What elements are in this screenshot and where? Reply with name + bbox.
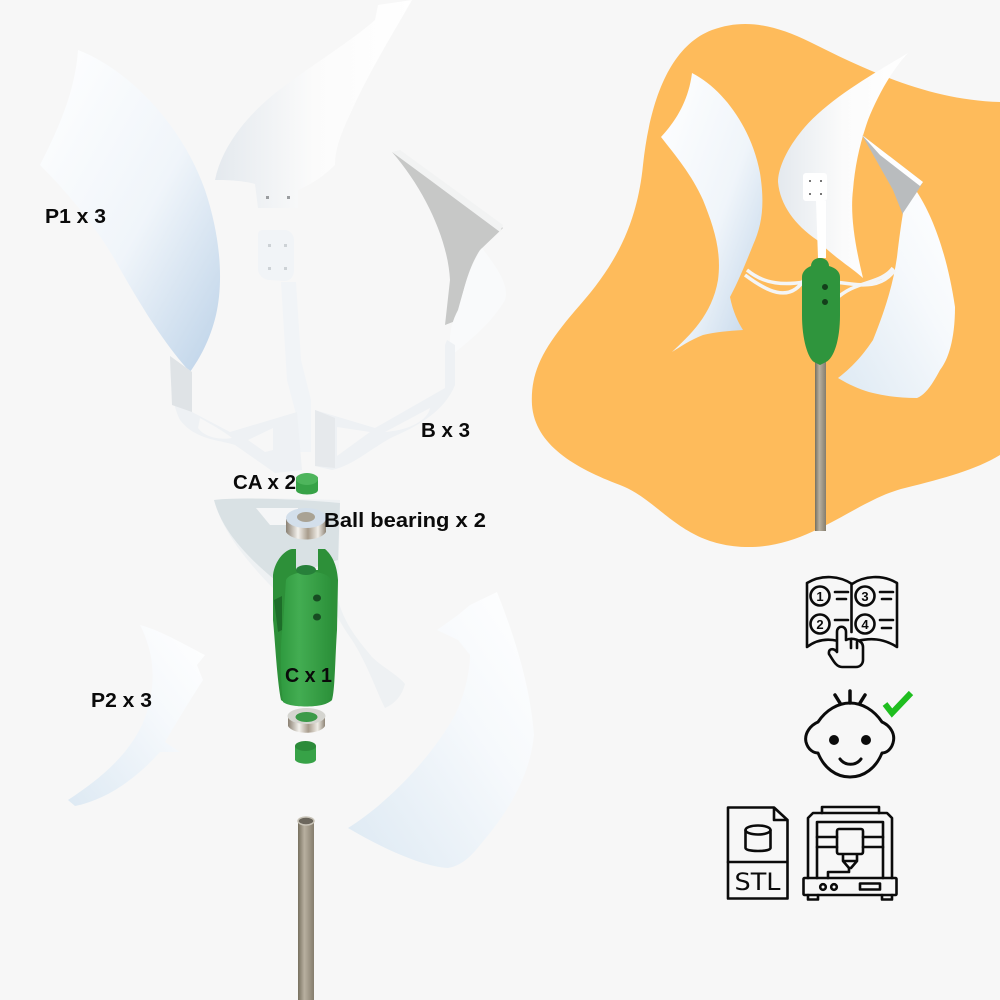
lower bearing side: [288, 716, 325, 733]
icon: STL file: STL: [734, 868, 781, 896]
top-center bracket holes: [266, 196, 290, 199]
assembled turbine: [661, 53, 955, 531]
label: CA: CA x 2: [233, 472, 296, 494]
assembled: right blade top edge: [862, 135, 923, 186]
part: B bracket assembly: [170, 230, 455, 473]
part: CA top collar: [296, 473, 318, 494]
label: ball bearing: Ball bearing x 2: [324, 510, 486, 532]
bracket left arm: [170, 356, 302, 473]
icon: instruction book: 4: [861, 617, 869, 632]
right blade body: [450, 248, 506, 355]
label: B: B x 3: [421, 420, 470, 442]
body front column: [281, 572, 333, 706]
rod opening: [298, 817, 314, 825]
lower bearing bore: [296, 712, 318, 722]
icon: green check mark: [885, 693, 911, 713]
assembled: bracket holes: [809, 180, 822, 195]
part: metal rod: [298, 817, 314, 1000]
assembled: left blade: [661, 73, 762, 352]
bracket vertical arm: [281, 282, 311, 452]
part: green C body: [273, 549, 338, 706]
lower collar side: [295, 746, 316, 764]
assembled: right blade: [838, 192, 955, 398]
rod shaft: [298, 820, 314, 1000]
bearing side: [286, 519, 326, 540]
part: right top blade: [392, 150, 506, 355]
lower collar top: [295, 741, 316, 751]
icon: STL file: [728, 808, 788, 898]
part: lower-center blade: [214, 498, 405, 708]
bracket left triangle cutout: [248, 428, 273, 452]
lower bearing face: [288, 708, 326, 724]
collar side: [296, 474, 318, 494]
bracket right arm: [315, 340, 455, 470]
assembled: center blade: [778, 53, 908, 278]
body rear shell: [273, 549, 338, 706]
icon: instruction book: [807, 577, 897, 667]
part: CA bottom collar: [295, 741, 316, 764]
collar top: [296, 473, 318, 485]
part: P2 left lower blade: [68, 625, 205, 806]
right blade inner gray: [392, 152, 503, 325]
right blade outer edge: [392, 150, 503, 232]
icon: instruction book: 2: [816, 617, 824, 632]
lower-center blade shadowed area: [214, 499, 340, 580]
icon: instruction book: 3: [861, 589, 869, 604]
assembled: bracket arms: [745, 268, 895, 300]
icon: 3D printer: [804, 807, 896, 900]
label: C: C x 1: [285, 665, 332, 687]
part: ball bearing bottom: [288, 708, 326, 733]
top-center blade body: [215, 0, 412, 208]
label: P1: P1 x 3: [45, 206, 106, 228]
icon: instruction book: 1: [816, 589, 824, 604]
bracket right slot cutout: [385, 408, 430, 432]
bracket right plate: [315, 410, 335, 468]
bracket plate holes: [268, 244, 287, 270]
assembled: bracket arm: [816, 201, 826, 258]
body holes: [313, 594, 321, 620]
bearing bore: [297, 512, 315, 522]
orange blob backdrop: [532, 24, 1000, 547]
bracket left cutouts: [198, 418, 232, 439]
lower-center blade bracket: [256, 508, 298, 525]
bearing face: [286, 508, 326, 528]
lower-center blade body: [214, 498, 405, 708]
assembled: rod: [815, 360, 826, 531]
assembled: right blade inner: [862, 135, 923, 215]
side slots: [274, 596, 282, 632]
assembled: hub holes: [822, 284, 828, 305]
assembled: green hub: [802, 258, 840, 365]
assembled: blade bracket plate: [803, 173, 827, 201]
part: large lower-right blade: [348, 592, 534, 868]
icon: baby face: [806, 691, 894, 777]
part: P1 left blade: [40, 50, 220, 372]
bracket left plate: [170, 356, 192, 412]
part: top-center blade: [215, 0, 412, 208]
bracket plate top: [258, 230, 294, 281]
label: P2: P2 x 3: [91, 690, 152, 712]
bracket right triangle cutout: [337, 427, 370, 456]
body top opening: [296, 565, 316, 575]
part: ball bearing top: [286, 508, 326, 540]
